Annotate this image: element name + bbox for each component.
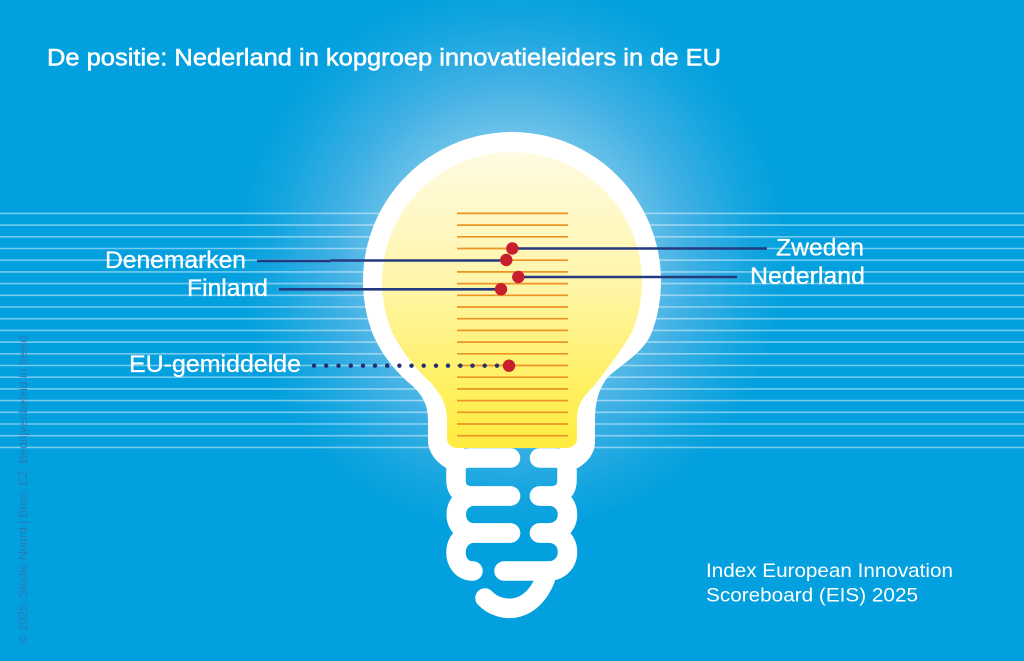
glow behind bulb <box>237 0 787 533</box>
Finland marker <box>187 275 507 302</box>
Finland leader line <box>279 288 501 291</box>
Nederland label: Nederland <box>750 263 865 290</box>
index caption <box>706 560 953 606</box>
Finland dot <box>495 283 507 295</box>
Zweden leader line <box>512 247 767 250</box>
orange scale lines <box>457 213 568 436</box>
bulb screw base <box>456 458 568 608</box>
Denemarken label: Denemarken <box>105 247 246 274</box>
Nederland dot <box>512 271 524 283</box>
Nederland marker <box>512 263 865 290</box>
Denemarken dot <box>500 254 512 266</box>
Zweden dot <box>506 242 518 255</box>
EU label: EU-gemiddelde <box>129 351 301 378</box>
EU-gemiddelde marker <box>129 351 515 378</box>
title: De positie: Nederland in kopgroep innovatieleiders in de EU <box>47 44 721 72</box>
Zweden label: Zweden <box>776 234 864 262</box>
caption line 1: Index European Innovation <box>706 560 953 582</box>
bulb white outline <box>363 132 661 468</box>
copyright credit: © 2025, Studio Noord | Bron: EZ, Bedrijvenbeleid in beeld <box>16 336 30 643</box>
Denemarken leader line <box>257 259 506 262</box>
Nederland leader line <box>518 276 737 278</box>
horizontal light lines <box>0 213 1024 447</box>
EU dotted leader <box>312 364 499 368</box>
bulb yellow glass <box>382 152 642 448</box>
light bulb <box>363 132 661 608</box>
caption line 2: Scoreboard (EIS) 2025 <box>706 584 918 606</box>
Finland label: Finland <box>187 275 268 302</box>
EU dot <box>503 360 515 372</box>
Zweden marker <box>506 234 864 262</box>
Denemarken marker <box>105 247 512 274</box>
